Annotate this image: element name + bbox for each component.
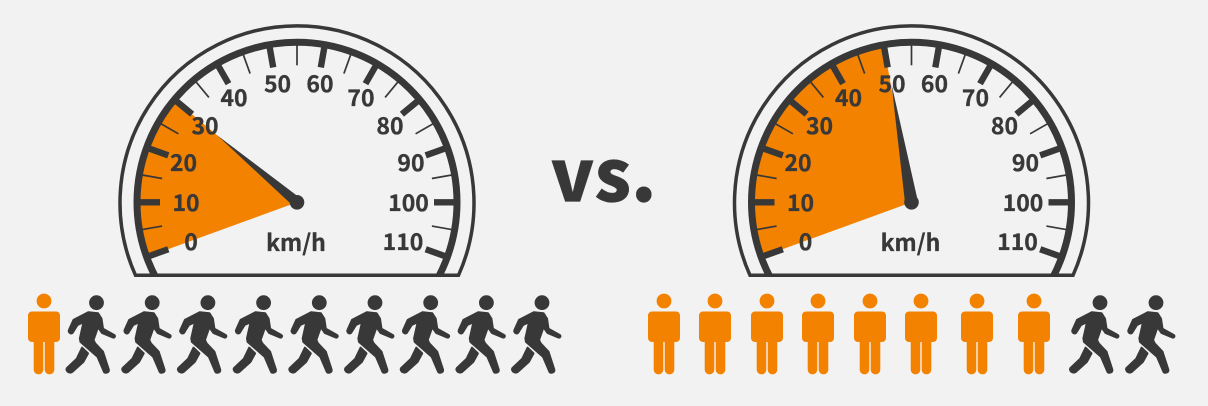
icon: walking person <box>178 295 226 373</box>
icon: walking person <box>1070 295 1118 373</box>
people row: left, one stopped and nine walking <box>28 294 560 374</box>
gauge: left speedometer at 30 km/h <box>120 26 474 362</box>
speed scale numbers <box>170 65 429 258</box>
icon: standing person <box>28 294 60 374</box>
icon: standing person <box>699 294 731 374</box>
orange speed wedge to 30 <box>137 100 297 257</box>
icon: walking person <box>289 295 338 373</box>
icon: walking person <box>234 295 282 373</box>
people row: right, eight stopped and two walking <box>648 294 1174 374</box>
icon: standing person <box>905 294 937 374</box>
heading: vs.: vs. <box>551 118 656 222</box>
gauge: right speedometer at 50 km/h <box>734 26 1088 362</box>
icon: standing person <box>854 294 886 374</box>
gauge dial with ticks <box>734 26 1088 362</box>
icon: walking person <box>122 295 171 373</box>
icon: walking person <box>456 295 505 373</box>
orange speed wedge to 50 <box>751 45 912 257</box>
icon: standing person <box>648 294 680 374</box>
icon: walking person <box>512 295 560 373</box>
needle pointing to 50 <box>892 84 919 210</box>
icon: walking person <box>401 295 449 373</box>
speed scale numbers <box>784 65 1043 258</box>
icon: standing person <box>802 294 834 374</box>
icon: standing person <box>1018 294 1050 374</box>
icon: walking person <box>1126 295 1174 373</box>
icon: standing person <box>751 294 783 374</box>
needle pointing to 30 <box>217 135 304 210</box>
gauge dial with ticks <box>120 26 474 362</box>
icon: standing person <box>961 294 993 374</box>
icon: walking person <box>67 295 115 373</box>
icon: walking person <box>345 295 393 373</box>
